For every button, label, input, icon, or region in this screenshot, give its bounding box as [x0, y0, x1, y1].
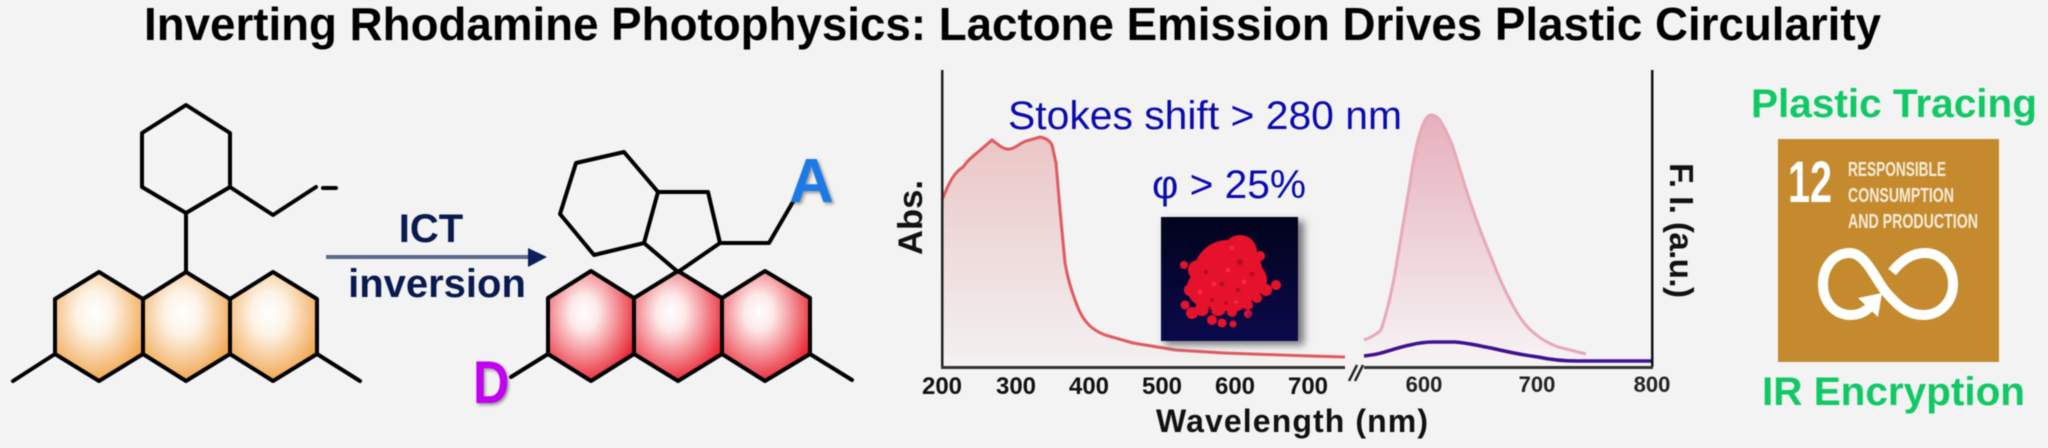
- acceptor chain: [720, 200, 794, 243]
- benzene ring: [560, 152, 658, 255]
- inset photo of red emissive powder: [1161, 217, 1304, 345]
- left tick labels: 400: [1069, 373, 1109, 400]
- left axis: [941, 70, 944, 367]
- icon: infinity loop with arrow: [1823, 253, 1953, 317]
- emission fill: [1364, 115, 1586, 362]
- methyl bonds: [13, 354, 360, 381]
- application: plastic tracing label: Plastic Tracing: [1751, 82, 2037, 126]
- donor label D: D: [473, 349, 509, 416]
- right tick labels: 800: [1634, 372, 1670, 397]
- emission curve: [1364, 115, 1586, 354]
- spectra chart: [892, 70, 1700, 439]
- benzene ring: [142, 105, 230, 213]
- goal name: CONSUMPTION: [1848, 185, 1954, 207]
- quantum yield annotation: φ > 25%: [1152, 163, 1306, 207]
- goal name: RESPONSIBLE: [1848, 159, 1946, 181]
- y axis title fluorescence: F. I. (a.u.): [1663, 163, 1700, 298]
- left molecule: closed ICT form: [13, 105, 360, 381]
- left tick labels: 300: [996, 373, 1036, 400]
- inversion label: inversion: [348, 262, 526, 306]
- goal number: 12: [1788, 150, 1832, 215]
- absorption curve: [942, 137, 1345, 357]
- absorption fill: [942, 137, 1345, 365]
- left tick labels: 700: [1288, 373, 1328, 400]
- y axis title absorbance: Abs.: [892, 180, 930, 255]
- orange hexagon right: [230, 272, 317, 381]
- axis break: [1349, 365, 1363, 381]
- acceptor label A: A: [789, 147, 834, 216]
- lactone ring: [644, 192, 720, 272]
- red hexagon right: [722, 271, 810, 381]
- red hexagon left: [548, 271, 634, 381]
- right tick labels: [1406, 372, 1670, 397]
- x axis title: Wavelength (nm): [1156, 403, 1428, 439]
- donor and methyl bonds: [511, 354, 852, 380]
- left tick labels: [922, 373, 1328, 400]
- x axis right part: [1364, 366, 1653, 369]
- arrow: [326, 248, 547, 267]
- weak purple emission curve: [1364, 342, 1652, 361]
- badge background: [1778, 139, 1999, 362]
- right axis: [1651, 70, 1654, 367]
- goal name: AND PRODUCTION: [1848, 211, 1978, 233]
- connecting bond: [184, 213, 188, 272]
- red hexagon centre: [634, 271, 722, 381]
- Stokes shift annotation: Stokes shift > 280 nm: [1008, 94, 1402, 138]
- right tick labels: 600: [1406, 372, 1442, 397]
- SDG 12 badge: [1778, 139, 1999, 362]
- ICT inversion arrow: [326, 207, 547, 306]
- carboxylate side chain: [230, 187, 336, 215]
- orange hexagon left: [55, 272, 143, 381]
- right tick labels: 700: [1519, 372, 1555, 397]
- left tick labels: 200: [922, 373, 962, 400]
- application: IR encryption label: IR Encryption: [1762, 370, 2025, 414]
- x axis left part: [941, 366, 1345, 369]
- orange hexagon centre: [143, 272, 230, 381]
- goal name: [1848, 159, 1978, 233]
- ICT label: ICT: [399, 207, 463, 251]
- right molecule: lactone form: [511, 152, 852, 381]
- left tick labels: 500: [1142, 373, 1182, 400]
- left tick labels: 600: [1215, 373, 1255, 400]
